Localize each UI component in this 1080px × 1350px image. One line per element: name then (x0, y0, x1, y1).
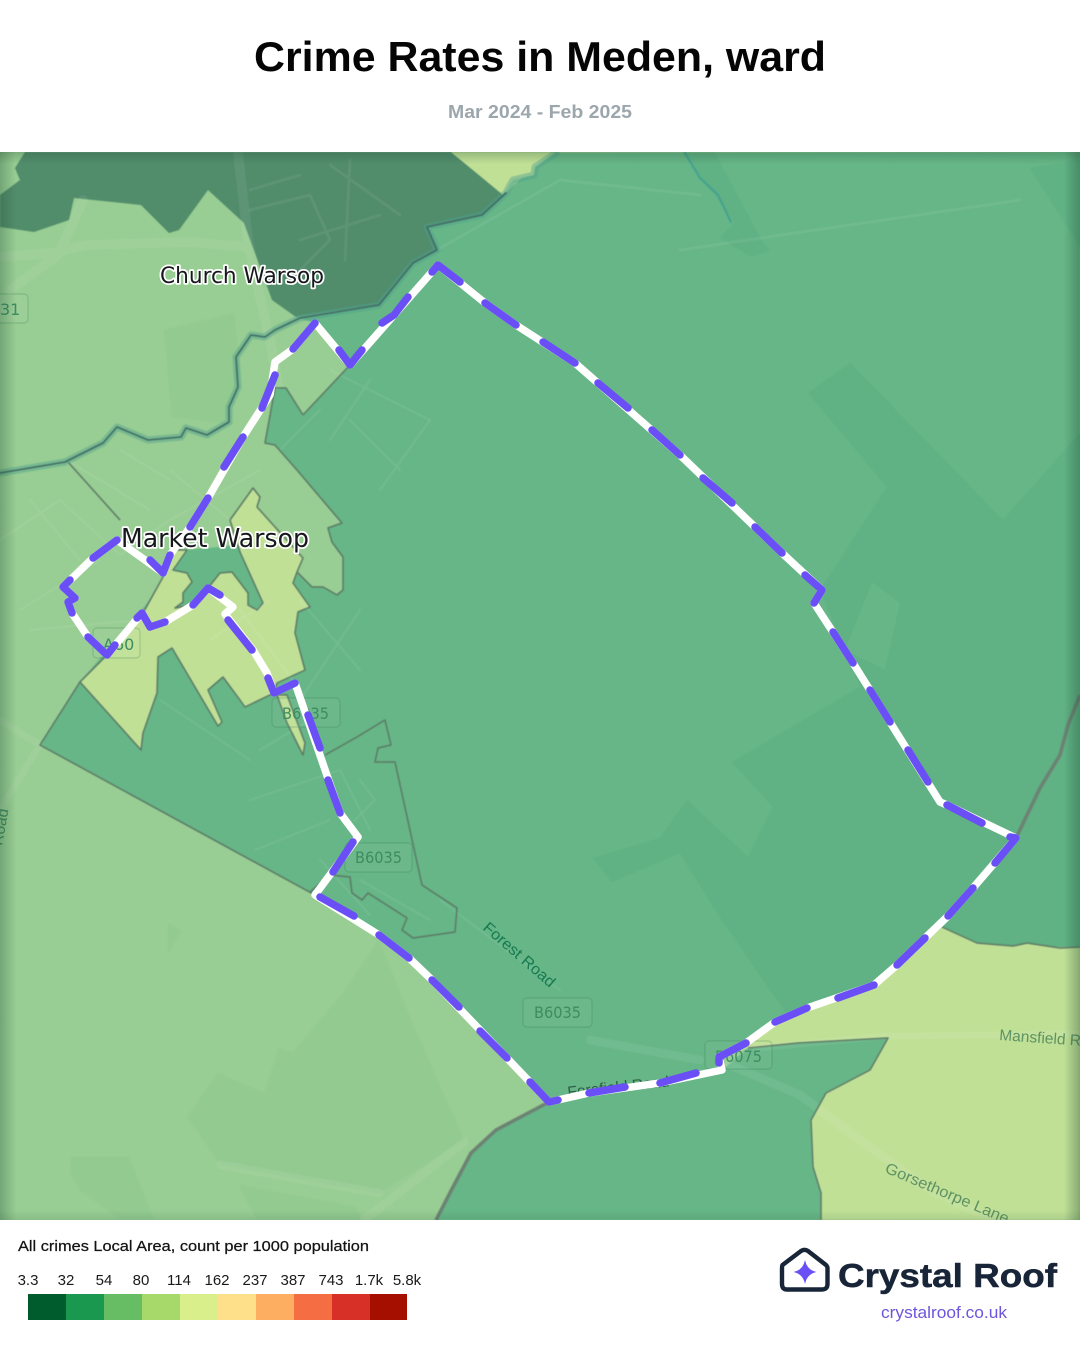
map edge shading (0, 152, 1080, 1220)
legend values: 387 (280, 1272, 306, 1289)
legend values: 237 (242, 1272, 268, 1289)
road shields: B6035 (534, 1003, 581, 1022)
legend colour scale (28, 1294, 407, 1320)
legend values: 5.8k (393, 1272, 422, 1289)
choropleth area: light green base (0, 152, 1080, 1220)
map panel (0, 152, 1080, 1228)
river (0, 153, 731, 473)
logo wordmark: Crystal Roof (838, 1257, 1058, 1294)
legend values: 1.7k (355, 1272, 384, 1289)
woodland clearing (845, 582, 900, 670)
icon: house with star (782, 1250, 828, 1290)
legend values: 80 (133, 1272, 149, 1289)
place label: Church Warsop: Church Warsop (160, 264, 324, 289)
roads (42, 152, 1021, 1110)
legend values: 3.3 (18, 1272, 38, 1289)
logo: Crystal Roof (782, 1250, 1058, 1322)
logo website: crystalroof.co.uk (881, 1304, 1008, 1322)
woodland patches: darker green (687, 152, 1080, 947)
title: Crime Rates in Meden, ward (254, 33, 826, 80)
place label: Market Warsop: Market Warsop (121, 524, 309, 554)
road shields: A60 (103, 635, 134, 654)
Meden ward boundary (63, 265, 1016, 1102)
road names (0, 807, 1080, 1228)
legend values: 54 (96, 1272, 112, 1289)
legend values (18, 1272, 422, 1289)
road shields: B6035 (355, 848, 402, 867)
legend values: 114 (167, 1272, 191, 1289)
choropleth area: medium green south (436, 1038, 888, 1220)
legend values: 162 (204, 1272, 230, 1289)
road names: Gorsethorpe Lane (882, 1160, 1012, 1228)
legend values: 743 (318, 1272, 344, 1289)
choropleth patches: light woodland (70, 313, 464, 1220)
road names: Forest Road (479, 919, 558, 991)
subtitle: date range: Mar 2024 - Feb 2025 (448, 102, 632, 122)
road shields: B6075 (715, 1047, 762, 1066)
choropleth area: yellow-green Market Warsop (80, 488, 310, 755)
choropleth area: dark green Church Warsop (0, 152, 506, 317)
road shields (0, 294, 772, 1069)
legend (18, 1238, 422, 1320)
road shields: 31 (0, 300, 20, 319)
choropleth area: yellow-green south east (719, 927, 1080, 1220)
ward boundary lines (40, 365, 1080, 1220)
road shields: B6035 (282, 704, 329, 723)
choropleth area: yellow-green north (451, 152, 556, 195)
legend values: 32 (58, 1272, 74, 1289)
choropleth area: medium green ward (40, 152, 1080, 1102)
legend title: All crimes Local Area, count per 1000 population (18, 1238, 369, 1255)
road names: Forefield Road (567, 1073, 670, 1101)
